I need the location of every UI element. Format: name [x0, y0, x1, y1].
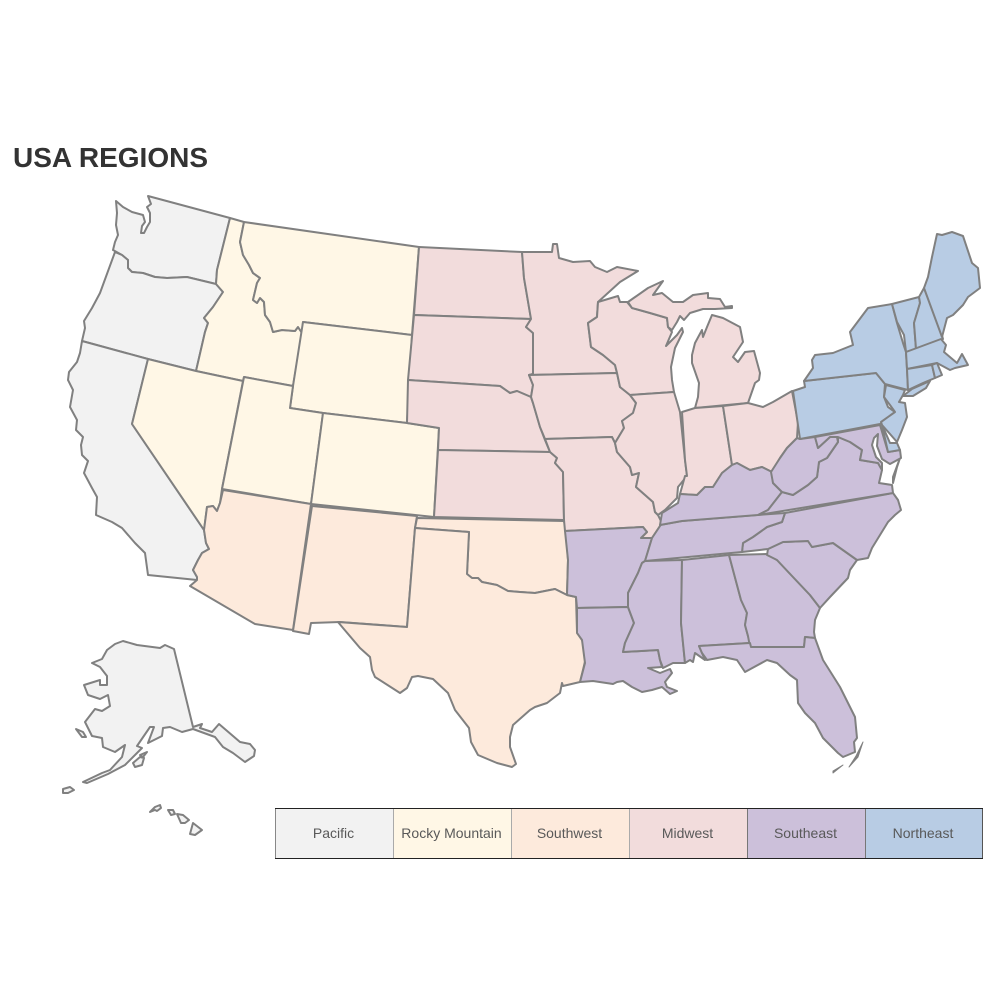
state: Kentucky — [660, 463, 782, 525]
state: Tennessee — [645, 513, 785, 561]
state: New Mexico — [293, 506, 417, 634]
state: Utah — [222, 377, 323, 504]
state: Delaware — [882, 425, 900, 452]
state: Florida — [699, 637, 857, 757]
state: Ohio — [723, 391, 798, 472]
state: Connecticut — [907, 365, 935, 390]
state: Alabama — [681, 555, 750, 663]
legend item: Pacific — [275, 809, 393, 858]
state: Rhode Island — [932, 363, 942, 378]
Florida Keys — [833, 742, 863, 773]
region: Midwest — [407, 244, 798, 538]
legend item: Midwest: Midwest — [662, 825, 713, 841]
state: Mississippi — [623, 560, 685, 668]
state: Louisiana — [577, 607, 677, 694]
state: Indiana — [680, 406, 732, 495]
state: Massachusetts — [906, 339, 968, 370]
state: Georgia — [729, 554, 820, 647]
state: Nevada — [132, 359, 243, 530]
legend item: Northeast — [865, 809, 983, 858]
state: West Virginia — [771, 437, 838, 495]
state: Missouri — [545, 437, 662, 538]
state: South Dakota — [408, 315, 533, 397]
title: USA REGIONS — [13, 142, 208, 173]
state: Nebraska — [407, 380, 550, 452]
legend item: Southwest — [511, 809, 629, 858]
region: Rocky Mountain — [132, 218, 439, 530]
state: New York — [804, 304, 908, 390]
state: North Carolina — [742, 493, 901, 560]
region: Northeast — [793, 232, 980, 452]
legend item: Southeast — [747, 809, 865, 858]
Virginia eastern shore — [893, 458, 900, 483]
legend — [275, 808, 983, 859]
state: Minnesota — [522, 244, 638, 375]
state: New Jersey — [881, 385, 907, 442]
state: Washington — [113, 196, 230, 284]
region: Pacific — [63, 196, 255, 835]
state: New Hampshire — [914, 288, 943, 349]
state: Vermont — [892, 297, 920, 352]
state: Iowa — [529, 373, 636, 443]
region: Southwest — [190, 490, 587, 767]
state: Idaho — [196, 218, 302, 386]
state: Illinois — [615, 392, 687, 515]
state: Arkansas — [565, 527, 652, 608]
state: Pennsylvania — [793, 373, 895, 439]
state: Kansas — [434, 450, 564, 520]
state: Arizona — [190, 490, 311, 630]
state: Montana — [240, 222, 419, 335]
state: Alaska — [83, 641, 255, 783]
legend item: Northeast: Northeast — [893, 825, 953, 841]
state: Wisconsin — [588, 296, 683, 395]
legend item: Rocky Mountain — [393, 809, 511, 858]
state: Oklahoma — [415, 518, 568, 595]
state: Oregon — [82, 252, 223, 371]
state: Wyoming — [290, 322, 412, 423]
state: Maryland — [815, 425, 901, 470]
state: North Dakota — [414, 247, 531, 319]
state: Virginia — [758, 437, 893, 515]
legend item: Rocky Mountain: Rocky Mountain — [401, 825, 502, 841]
state: South Carolina — [767, 541, 857, 608]
state: Hawaii — [150, 805, 202, 835]
state: Maine — [924, 232, 980, 337]
legend item: Southeast: Southeast — [774, 825, 837, 841]
state: Michigan — [628, 281, 760, 408]
state: California — [68, 341, 209, 580]
legend item: Midwest — [629, 809, 747, 858]
state: Texas — [338, 528, 587, 767]
legend item: Pacific: Pacific — [313, 825, 354, 841]
legend item: Southwest: Southwest — [537, 825, 602, 841]
region: Southeast — [565, 425, 901, 773]
state: Colorado — [311, 413, 439, 517]
Alaska islands — [63, 729, 147, 793]
Long Island — [903, 381, 930, 396]
